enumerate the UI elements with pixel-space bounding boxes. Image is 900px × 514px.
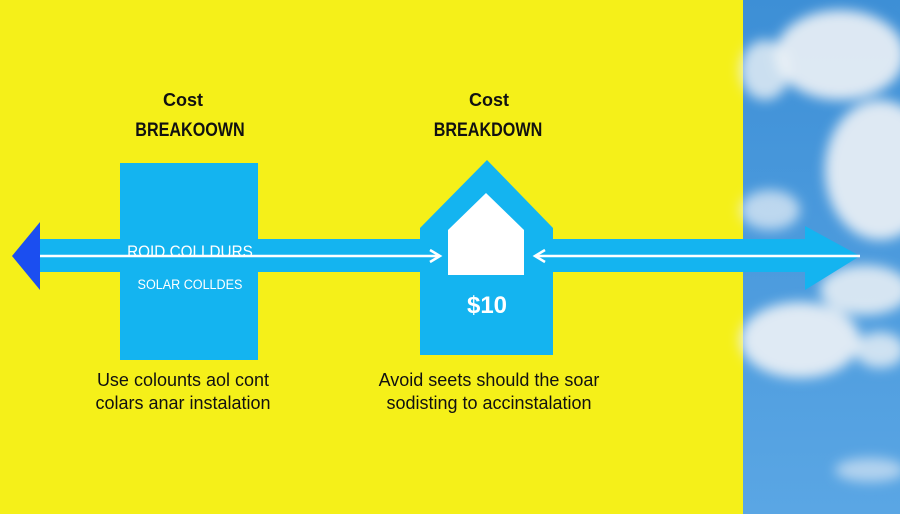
house box: [420, 160, 553, 355]
caption left: colars anar instalation: [95, 393, 271, 413]
caption right: Avoid seets should the soar: [379, 370, 599, 390]
heading left: Cost: [163, 90, 203, 110]
box label text: ROID COLLDURS: [127, 242, 253, 261]
heading left: [135, 90, 245, 140]
heading right: BREAKDOWN: [434, 119, 542, 140]
caption right: sodisting to accinstalation: [386, 393, 592, 413]
box label text: [127, 242, 253, 292]
heading right: [434, 90, 542, 140]
heading right: Cost: [469, 90, 509, 110]
caption left: Use colounts aol cont: [97, 370, 269, 390]
horizontal arrow bar: [12, 222, 860, 290]
caption left: [95, 370, 271, 413]
left box: [120, 163, 258, 360]
sky photo panel: [740, 0, 900, 514]
price: $10: [467, 292, 507, 319]
box label text: SOLAR COLLDES: [138, 276, 243, 292]
heading left: BREAKOOWN: [135, 119, 245, 140]
caption right: [379, 370, 599, 413]
icon: white house: [448, 193, 524, 275]
